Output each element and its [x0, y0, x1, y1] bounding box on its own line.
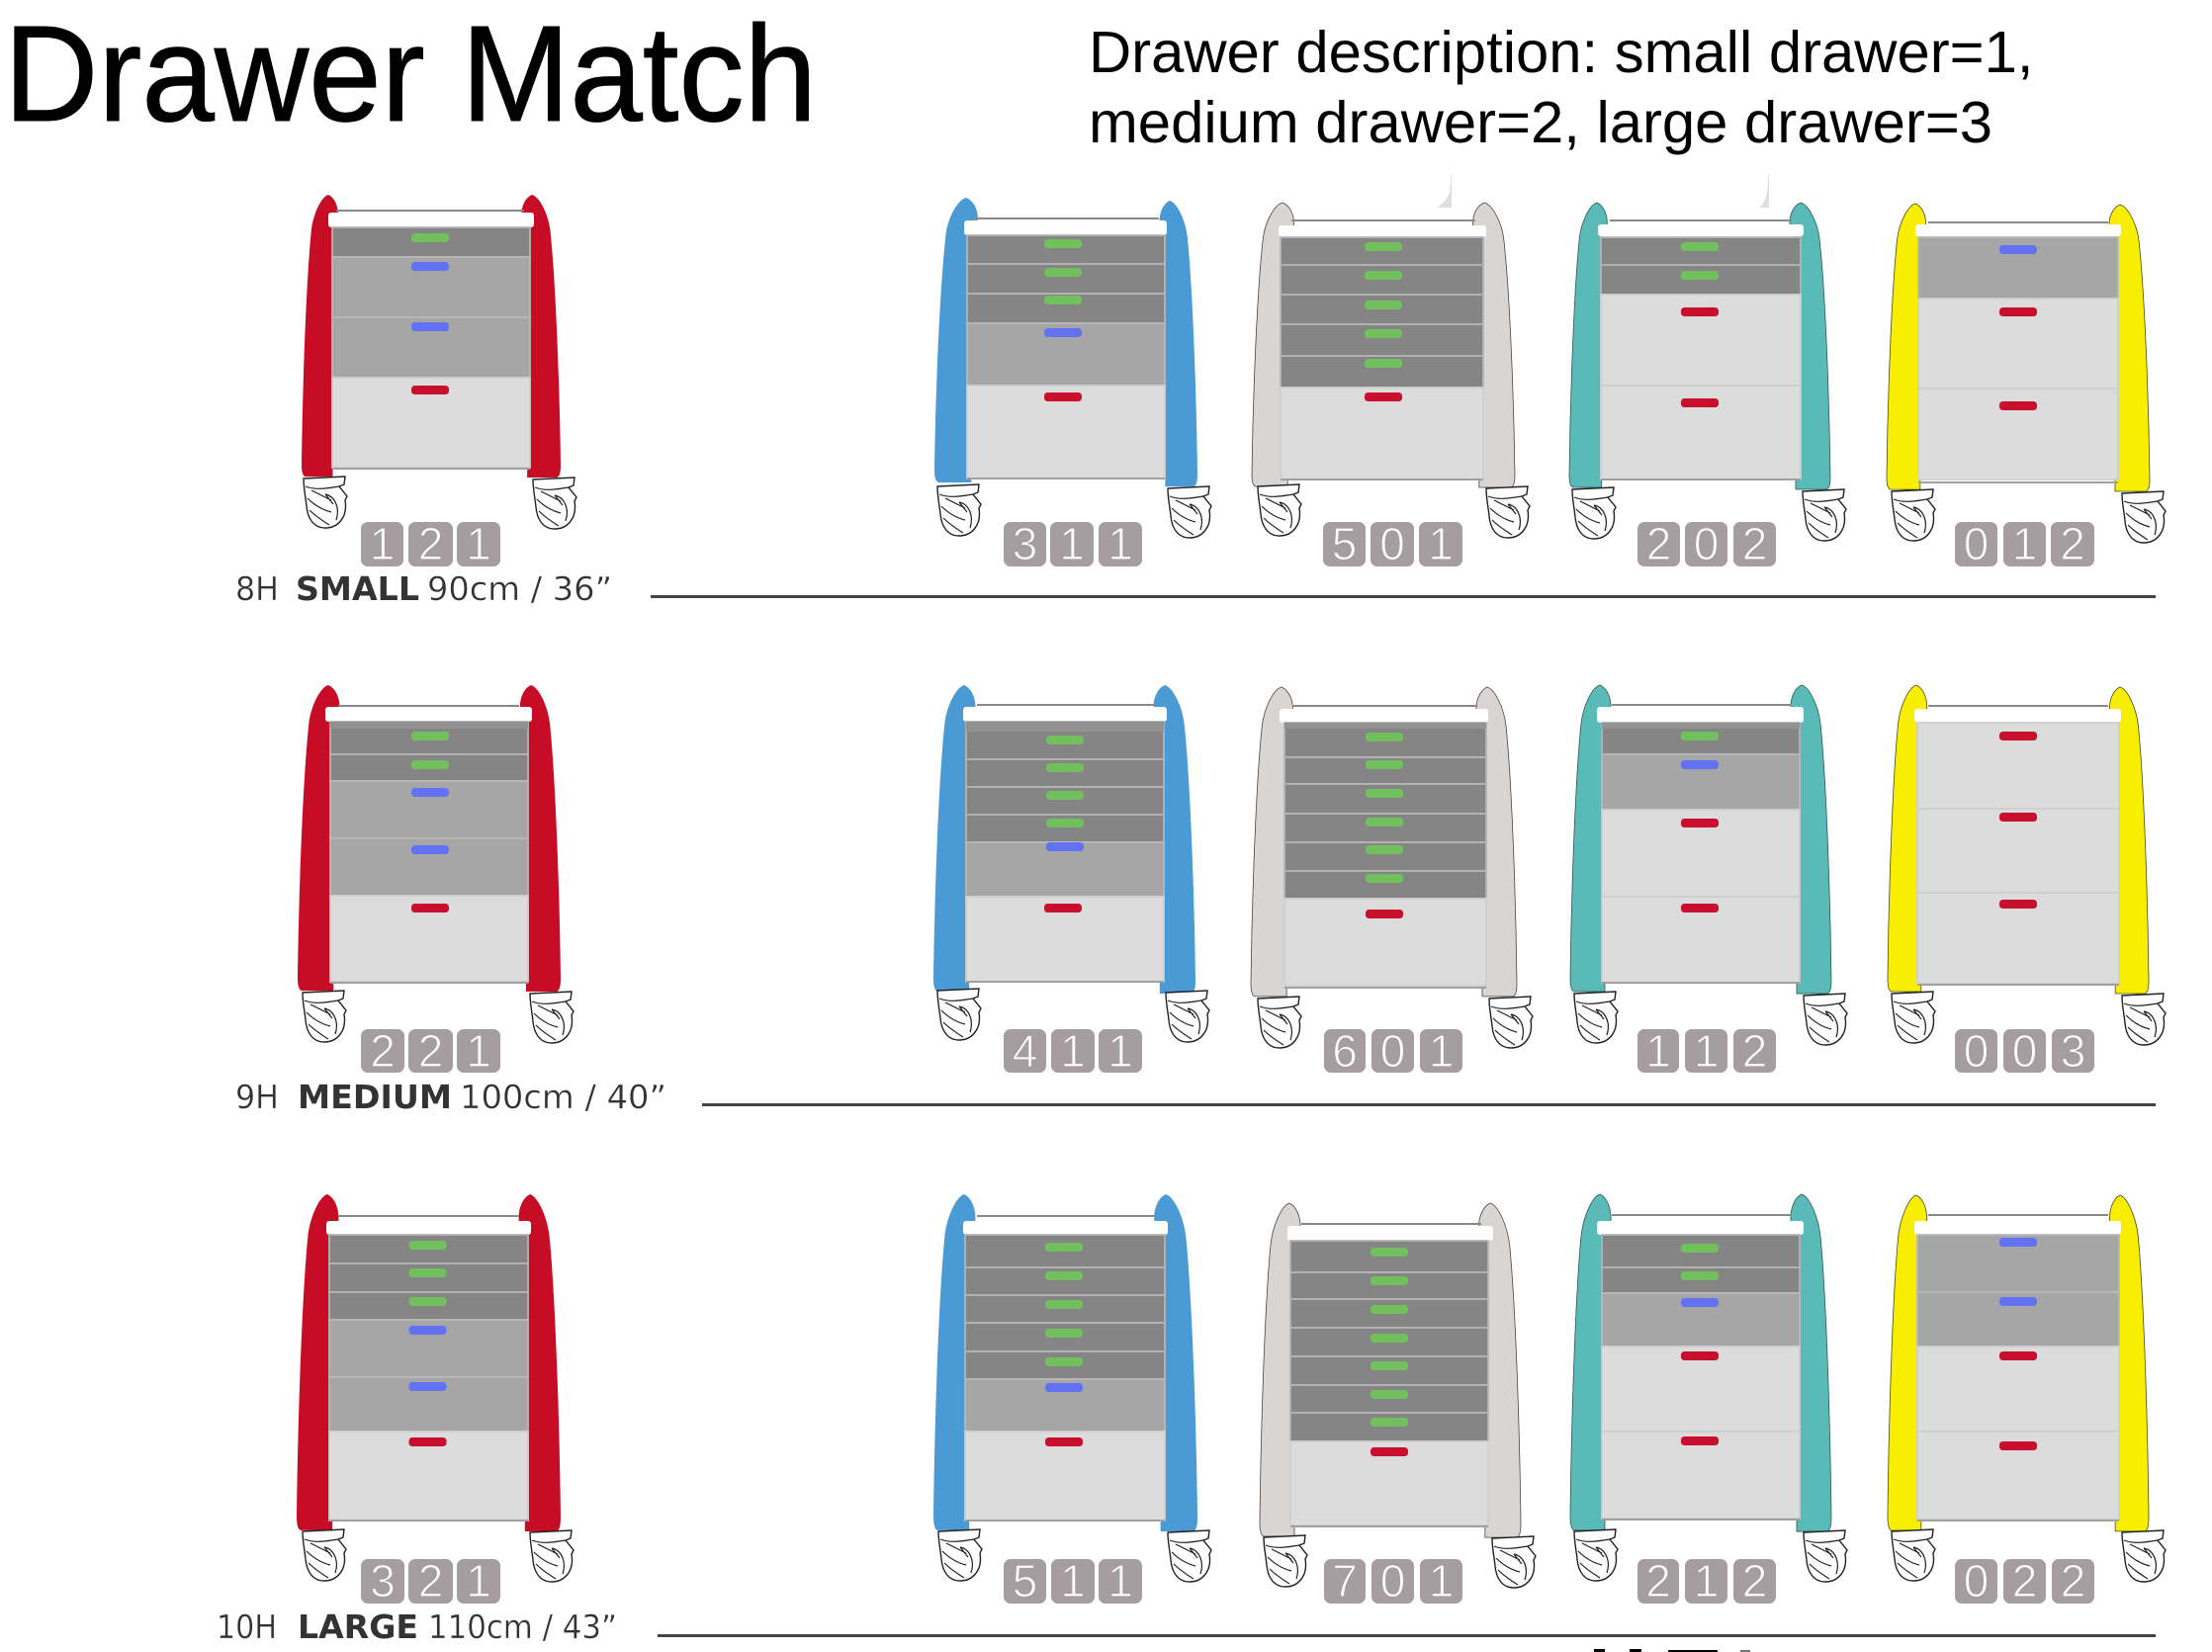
drawers	[332, 227, 530, 469]
badge 5 0 1: 1	[1428, 518, 1454, 569]
badge 2 1 2	[1637, 1555, 1776, 1607]
cart: red 3-2-1	[297, 1194, 574, 1607]
badge 2 2 1: 2	[370, 1025, 396, 1077]
badge 2 0 2: 2	[1646, 518, 1671, 569]
wheels	[303, 1529, 574, 1582]
badge 1 2 1: 1	[466, 518, 491, 569]
badge 2 0 2: 0	[1694, 518, 1719, 569]
badge 3 2 1: 2	[418, 1555, 443, 1607]
badge 2 2 1: 2	[418, 1025, 443, 1077]
right post	[2109, 1195, 2149, 1531]
cart: blue 5-1-1	[933, 1194, 1211, 1607]
top bar	[325, 706, 532, 722]
drawer handles	[1999, 245, 2037, 410]
drawers	[1602, 723, 1800, 983]
wheels	[1258, 997, 1533, 1048]
row 3 size label: 10H	[217, 1608, 277, 1646]
top bar	[1914, 706, 2121, 723]
left post	[933, 685, 975, 992]
right post	[1154, 1194, 1197, 1531]
row 2 size label: MEDIUM	[298, 1078, 452, 1116]
badge 2 2 1: 1	[466, 1025, 491, 1077]
row 1 size label: 90cm / 36”	[427, 569, 612, 608]
badge 5 1 1: 5	[1013, 1555, 1037, 1607]
drawers	[1284, 723, 1486, 988]
badge 2 2 1	[361, 1025, 500, 1077]
badge 0 0 3: 0	[2012, 1025, 2037, 1077]
wheels	[1892, 992, 2166, 1045]
drawer handles	[409, 1241, 447, 1446]
cart: teal 2-0-2	[1569, 203, 1846, 569]
row 3 size label: 110cm / 43”	[428, 1608, 617, 1646]
drawer description text	[1089, 19, 2033, 155]
row 1 size label: SMALL	[296, 569, 419, 608]
badge 7 0 1: 7	[1332, 1555, 1358, 1607]
badge 3 1 1: 3	[1013, 518, 1037, 569]
drawer description text: medium drawer=2, large drawer=3	[1089, 89, 1992, 155]
badge 7 0 1: 0	[1380, 1555, 1405, 1607]
row 1 rule	[651, 595, 2156, 598]
drawer handles	[1365, 242, 1402, 401]
clipped marks at the bottom edge	[1594, 1649, 1750, 1652]
top bar	[1597, 1215, 1804, 1235]
badge 3 2 1: 1	[466, 1555, 491, 1607]
badge 0 1 2: 2	[2060, 518, 2085, 569]
wheels	[1892, 1529, 2166, 1582]
badge 0 0 3: 3	[2061, 1025, 2085, 1077]
cart: yellow 0-0-3	[1888, 685, 2166, 1077]
drawers	[965, 1235, 1165, 1521]
badge 7 0 1	[1324, 1555, 1462, 1607]
badge 2 0 2	[1637, 518, 1776, 569]
right post	[521, 195, 561, 478]
badge 1 2 1: 1	[370, 518, 395, 569]
badge 5 1 1: 1	[1107, 1555, 1133, 1607]
right post	[1791, 685, 1831, 994]
drawer handles	[1044, 239, 1082, 401]
smudge marks near the top carts	[1437, 170, 1769, 208]
left post	[934, 198, 978, 482]
badge 3 2 1: 3	[370, 1555, 396, 1607]
badge 0 2 2: 0	[1964, 1555, 1989, 1607]
row 3 size label: LARGE	[298, 1608, 418, 1646]
badge 4 1 1: 1	[1107, 1025, 1133, 1077]
drawer description text: Drawer description: small drawer=1,	[1089, 19, 2033, 85]
cart: yellow 0-2-2	[1888, 1195, 2166, 1607]
row 1 size label	[235, 569, 612, 608]
badge 4 1 1: 1	[1060, 1025, 1086, 1077]
right post	[1479, 1203, 1521, 1537]
wheels	[1264, 1535, 1536, 1588]
drawer handles	[1045, 1243, 1083, 1446]
row 2 size label: 100cm / 40”	[460, 1078, 666, 1116]
left post	[1251, 687, 1292, 997]
right post	[1790, 203, 1830, 489]
drawers	[1917, 723, 2119, 985]
badge 0 0 3	[1955, 1025, 2094, 1077]
left post	[297, 1194, 338, 1530]
wheels	[937, 989, 1209, 1042]
left post	[298, 685, 339, 991]
cart: yellow 0-1-2	[1887, 204, 2166, 569]
drawers	[1601, 237, 1801, 479]
badge 3 1 1: 1	[1059, 518, 1085, 569]
drawers	[967, 235, 1165, 478]
badge 5 0 1	[1323, 518, 1462, 569]
badge 1 2 1: 2	[418, 518, 443, 569]
badge 7 0 1: 1	[1429, 1555, 1454, 1607]
right post	[520, 685, 561, 992]
drawer handles	[1999, 732, 2037, 909]
badge 6 0 1: 0	[1380, 1025, 1405, 1077]
top bar	[1915, 222, 2121, 236]
badge 5 0 1: 0	[1379, 518, 1405, 569]
cart: red 2-2-1	[298, 685, 574, 1077]
badge 2 1 2: 1	[1694, 1555, 1719, 1607]
drawer handles	[1366, 733, 1403, 918]
badge 1 1 2: 2	[1742, 1025, 1767, 1077]
badge 6 0 1: 1	[1429, 1025, 1454, 1077]
top bar	[964, 218, 1167, 235]
badge 5 1 1	[1004, 1555, 1142, 1607]
badge 0 2 2: 2	[2061, 1555, 2085, 1607]
cart: red 1-2-1	[302, 195, 576, 569]
badge 3 2 1	[361, 1555, 500, 1607]
badge 1 1 2: 1	[1694, 1025, 1719, 1077]
right post	[1473, 203, 1515, 487]
row 2 rule	[702, 1103, 2156, 1106]
drawer handles	[1999, 1238, 2037, 1450]
left post	[1887, 204, 1926, 489]
cart: blue 4-1-1	[933, 685, 1209, 1077]
cart: gray 5-0-1	[1252, 203, 1530, 569]
badge 0 2 2	[1955, 1555, 2094, 1607]
badge 0 1 2: 0	[1964, 518, 1989, 569]
drawer handles	[411, 732, 449, 913]
right post	[519, 1194, 561, 1531]
right post	[1476, 687, 1517, 997]
drawer handles	[1681, 242, 1719, 407]
right post	[2109, 205, 2150, 491]
badge 5 0 1: 5	[1332, 518, 1357, 569]
badge 5 1 1: 1	[1060, 1555, 1086, 1607]
top bar	[963, 705, 1167, 722]
wheels	[1574, 992, 1847, 1045]
cart: teal 1-1-2	[1570, 685, 1847, 1077]
wheels	[1574, 1529, 1847, 1582]
top bar	[1597, 705, 1804, 723]
top bar	[1279, 220, 1486, 237]
left post	[1570, 685, 1611, 992]
left post	[933, 1194, 975, 1530]
top bar	[1914, 1215, 2121, 1235]
drawer handles	[1681, 732, 1719, 913]
row 3 rule	[658, 1634, 2156, 1637]
top bar	[963, 1216, 1168, 1235]
row 2: 9H medium carts	[298, 685, 2166, 1077]
top bar	[326, 1216, 531, 1235]
left post	[1252, 203, 1293, 486]
drawer handles	[411, 233, 449, 394]
row 2 size label: 9H	[235, 1078, 279, 1116]
drawers	[966, 722, 1164, 982]
top bar	[328, 211, 534, 227]
wheels	[1892, 489, 2166, 543]
right post	[1791, 1194, 1831, 1531]
left post	[1570, 1194, 1611, 1530]
drawer handles	[1044, 736, 1084, 913]
drawers	[1281, 237, 1483, 479]
wheels	[304, 477, 576, 529]
drawer handles	[1371, 1248, 1408, 1456]
cart: blue 3-1-1	[934, 198, 1211, 569]
row 3: 10H large carts	[297, 1194, 2166, 1607]
badge 6 0 1	[1324, 1025, 1462, 1077]
drawer handles	[1681, 1244, 1719, 1445]
badge 1 1 2: 1	[1645, 1025, 1671, 1077]
row 3 size label	[217, 1608, 617, 1646]
badge 0 1 2: 1	[2012, 518, 2037, 569]
wheels	[1258, 484, 1530, 538]
wheels	[1572, 487, 1846, 541]
badge 2 1 2: 2	[1742, 1555, 1767, 1607]
drawers	[1602, 1235, 1800, 1520]
top bar	[1280, 706, 1488, 723]
badge 4 1 1	[1004, 1025, 1142, 1077]
badge 4 1 1: 4	[1013, 1025, 1037, 1077]
cart: teal 2-1-2	[1570, 1194, 1847, 1607]
badge 1 2 1	[361, 518, 500, 569]
top bar	[1287, 1224, 1493, 1241]
badge 3 1 1: 1	[1107, 518, 1133, 569]
badge 0 1 2	[1955, 518, 2094, 569]
cart: gray 6-0-1	[1251, 687, 1533, 1077]
left post	[1888, 1195, 1927, 1530]
cart: gray 7-0-1	[1260, 1203, 1536, 1607]
row 1: 8H small carts	[302, 195, 2166, 569]
badge 6 0 1: 6	[1332, 1025, 1358, 1077]
badge 3 1 1	[1004, 518, 1142, 569]
right post	[1154, 685, 1195, 994]
badge 2 0 2: 2	[1742, 518, 1767, 569]
drawers	[1290, 1241, 1488, 1526]
drawers	[330, 722, 528, 983]
badge 1 1 2	[1637, 1025, 1776, 1077]
left post	[1888, 685, 1927, 992]
left post	[302, 195, 338, 477]
left post	[1260, 1203, 1300, 1536]
drawers	[329, 1235, 528, 1521]
row 1 size label: 8H	[235, 569, 279, 608]
row 2 size label	[235, 1078, 666, 1116]
right post	[1160, 201, 1197, 486]
drawers	[1917, 1235, 2119, 1521]
wheels	[938, 1529, 1211, 1582]
wheels	[937, 484, 1211, 538]
drawers	[1918, 237, 2118, 482]
badge 0 2 2: 2	[2012, 1555, 2037, 1607]
title: Drawer Match	[4, 0, 817, 150]
top bar	[1598, 220, 1804, 236]
left post	[1569, 203, 1607, 487]
wheels	[303, 991, 574, 1043]
right post	[2109, 687, 2149, 994]
badge 0 0 3: 0	[1964, 1025, 1989, 1077]
badge 2 1 2: 2	[1645, 1555, 1671, 1607]
